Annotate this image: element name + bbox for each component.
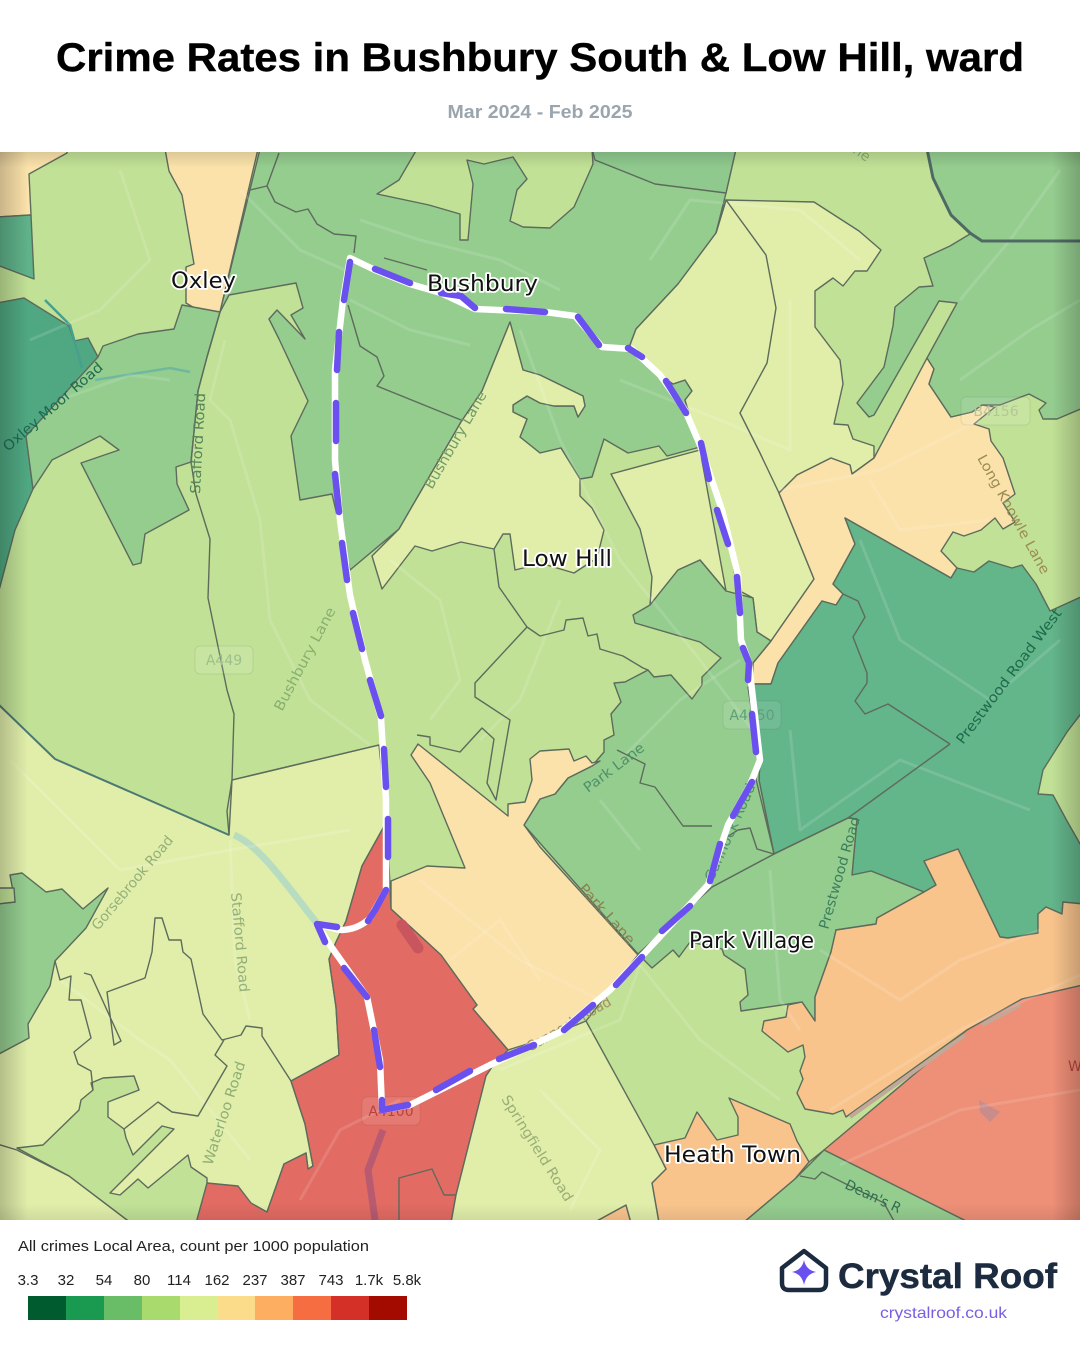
- icon: house with star: [782, 1251, 826, 1290]
- subtitle: date range: Mar 2024 - Feb 2025: [448, 102, 632, 122]
- website: crystalroof.co.uk: [880, 1305, 1008, 1322]
- road labels: Bushbury Lane: [422, 389, 490, 492]
- road labels: Dean's R: [842, 1177, 904, 1217]
- road shields: A4100: [368, 1104, 414, 1120]
- road labels: Gorsebrook Road: [89, 833, 177, 934]
- title: Crime Rates in Bushbury South & Low Hill, ward: [56, 36, 1024, 80]
- road labels: Stafford Road: [188, 393, 209, 494]
- legend scale labels: 743: [318, 1272, 344, 1289]
- legend colour ramp: [28, 1296, 407, 1320]
- legend scale labels: 162: [204, 1272, 230, 1289]
- road labels: Prestwood Road West: [953, 606, 1066, 747]
- place labels: Low Hill: [522, 547, 612, 572]
- road labels: Waterloo Road: [201, 1060, 249, 1167]
- road shields: A449: [206, 653, 242, 669]
- logo: Crystal Roof: [782, 1251, 1057, 1322]
- road labels: Cannock Road: [524, 994, 614, 1055]
- legend title: All crimes Local Area, count per 1000 population: [18, 1238, 369, 1255]
- legend scale labels: 3.3: [18, 1272, 38, 1289]
- road shields: B4156: [973, 404, 1019, 420]
- road network: [10, 170, 1080, 1210]
- ward boundary: [317, 258, 760, 1110]
- legend scale labels: 5.8k: [393, 1272, 422, 1289]
- legend scale labels: 387: [280, 1272, 306, 1289]
- road labels: ne: [850, 142, 873, 165]
- road shields: A4150: [729, 708, 775, 724]
- legend scale labels: 1.7k: [355, 1272, 384, 1289]
- road labels: Oxley Moor Road: [0, 360, 106, 455]
- place labels: Heath Town: [664, 1143, 801, 1168]
- road labels: Stafford Road: [227, 892, 252, 993]
- road labels: Bushbury Lane: [271, 605, 340, 714]
- road labels: Park Lane: [581, 740, 648, 796]
- place labels: [171, 269, 814, 1168]
- road labels: [0, 142, 1080, 1217]
- road shields: [195, 397, 1030, 1125]
- road labels: Cannock Road: [702, 781, 759, 884]
- road labels: Park Lane: [575, 881, 638, 948]
- ward boundary dashes: [317, 262, 756, 1110]
- place labels: Oxley: [171, 269, 236, 294]
- map edge shading: [0, 152, 1080, 1220]
- road labels: Springfield Road: [498, 1093, 576, 1205]
- legend: [18, 1238, 422, 1320]
- inner boundaries: [0, 149, 1080, 1223]
- legend scale labels: 54: [96, 1272, 112, 1289]
- legend scale labels: 237: [242, 1272, 268, 1289]
- legend scale labels: [18, 1272, 422, 1289]
- legend scale labels: 32: [58, 1272, 74, 1289]
- water and dark features: [45, 300, 1020, 1220]
- legend scale labels: 114: [167, 1272, 191, 1289]
- place labels: Bushbury: [427, 272, 538, 297]
- map regions by crime rate: [0, 149, 1080, 1223]
- legend scale labels: 80: [134, 1272, 150, 1289]
- road labels: Prestwood Road: [816, 815, 864, 931]
- brand name: Crystal Roof: [838, 1257, 1057, 1296]
- road labels: Long Knowle Lane: [974, 452, 1052, 577]
- place labels: Park Village: [689, 929, 814, 954]
